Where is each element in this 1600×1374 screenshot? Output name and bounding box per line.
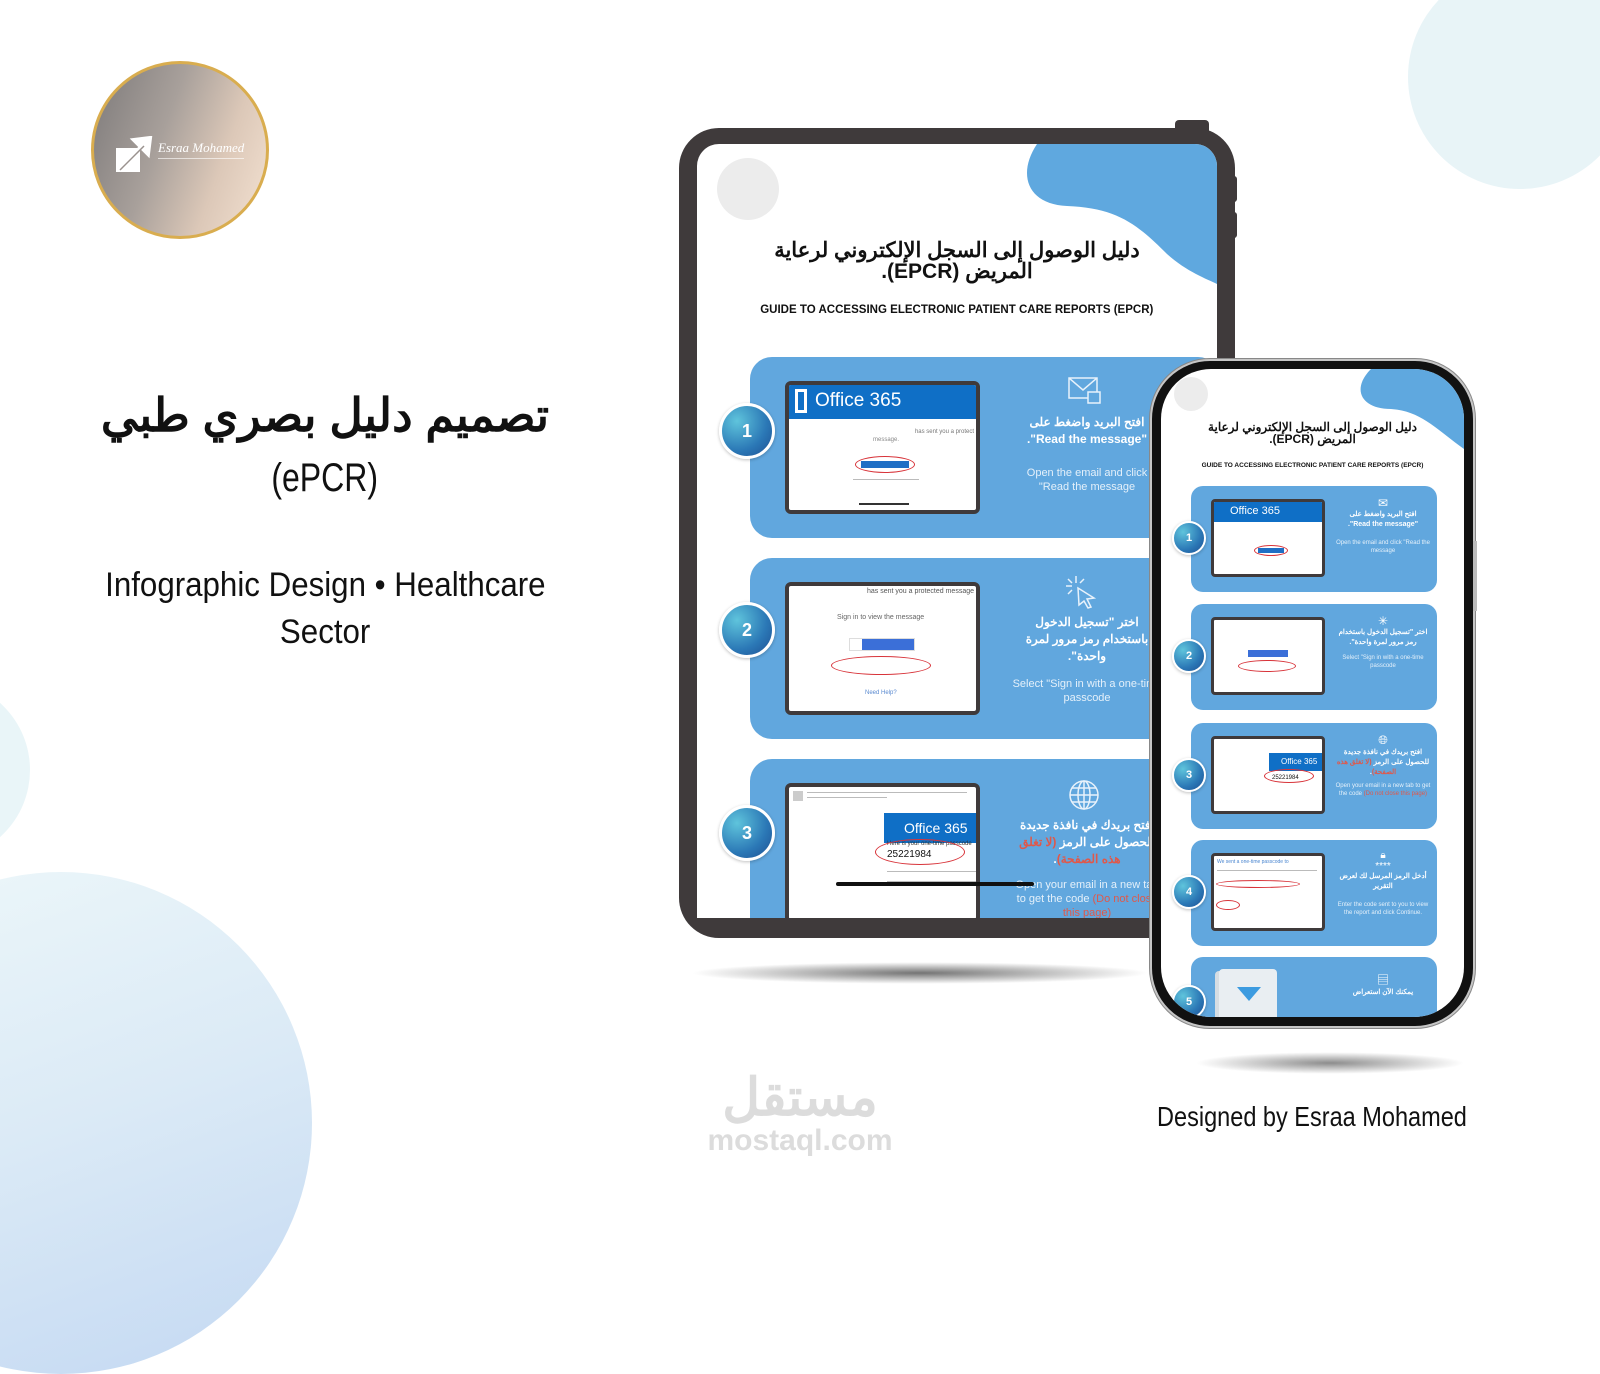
screenshot: sign in: has sent you a protected message	[867, 588, 974, 595]
step 1 text	[1027, 415, 1148, 493]
phone card 3: 25221984	[1272, 775, 1299, 781]
logo text: Esraa Mohamed	[158, 140, 244, 155]
phone card 1: ✉	[1378, 496, 1388, 510]
text block: category	[105, 566, 545, 651]
step 1 text: Open the email and click "Read the message	[1027, 467, 1147, 493]
phone card 2: Select "Sign in with a one-time passcode	[1342, 655, 1424, 669]
phone card 1: "Read the message".	[1348, 521, 1418, 528]
step number 2	[719, 602, 775, 658]
icon: mail lock	[1068, 377, 1101, 404]
phone card 4	[1191, 840, 1437, 946]
screenshot: sign in: Sign in to view the message	[837, 614, 924, 621]
subheading: ePCR: (ePCR)	[272, 456, 378, 500]
step 1 text: "Read the message".	[1027, 432, 1147, 446]
home indicator	[836, 882, 1034, 886]
step number 3: 3	[742, 822, 752, 842]
phone card 4: أدخل الرمز المرسل لك لعرض التقرير	[1339, 873, 1427, 890]
grey circle	[717, 158, 779, 220]
screenshot: passcode email: 25221984	[887, 849, 932, 860]
phone number 3: 3	[1186, 769, 1192, 781]
phone number 1	[1172, 521, 1206, 555]
step 2 text: Select "Sign in with a one-time passcode	[1013, 678, 1161, 704]
phone number 2: 2	[1186, 650, 1192, 662]
icon: globe	[1069, 780, 1099, 810]
phone card 4: Enter the code sent to you to view the report and click Continue.	[1338, 902, 1428, 916]
phone card 1: Open the email and click "Read the message	[1336, 540, 1430, 554]
step 1 text: افتح البريد واضغط على	[1030, 415, 1144, 429]
phone card 3: 🌐︎	[1378, 733, 1388, 747]
screenshot: office 365	[785, 381, 980, 514]
phone card 3: Office 365	[1281, 757, 1317, 766]
step 3 text: افتح بريدك في نافذة جديدة للحصول على الرمز (لا تغلق هذه الصفحة).	[1019, 818, 1155, 866]
grey circle	[1174, 377, 1208, 411]
card 3	[750, 759, 1220, 959]
top button	[1175, 120, 1209, 132]
tablet subtitle: GUIDE TO ACCESSING ELECTRONIC PATIENT CARE REPORTS (EPCR)	[760, 302, 1154, 316]
phone number 3	[1172, 758, 1206, 792]
phone card 5	[1191, 957, 1437, 1063]
screenshot: office 365: Office 365	[815, 390, 901, 411]
phone card 1: Office 365	[1230, 505, 1280, 517]
phone card 3: افتح بريدك في نافذة جديدة للحصول على الرمز (لا تغلق هذه الصفحة).	[1337, 749, 1429, 776]
screenshot: sign in	[785, 582, 980, 715]
phone number 5: 5	[1186, 996, 1192, 1008]
heading: arabic title: تصميم دليل بصري طبي	[101, 389, 549, 441]
phone card 3: Open your email in a new tab to get the code (Do not close this page)	[1336, 783, 1430, 797]
step 3 text	[1015, 818, 1159, 918]
tablet screen	[697, 144, 1217, 918]
phone number 1: 1	[1186, 532, 1192, 544]
tablet device	[679, 120, 1237, 938]
phone screen	[1161, 369, 1464, 1017]
watermark: mostaql: mostaql.com	[707, 1124, 893, 1157]
screenshot: passcode email: Here is your one-time passcode	[887, 841, 972, 847]
step number 2: 2	[742, 620, 752, 640]
phone card 4: We sent a one-time passcode to	[1217, 859, 1289, 865]
phone number 4	[1172, 875, 1206, 909]
phone card 5: يمكنك الآن استعراض	[1353, 989, 1413, 996]
phone card 4: 🔒︎	[1380, 850, 1386, 861]
phone card 2: اختر "تسجيل الدخول باستخدام رمز مرور لمرة واحدة".	[1339, 629, 1427, 646]
phone card 2	[1191, 604, 1437, 710]
phone number 5	[1172, 985, 1206, 1019]
side buttons	[1229, 176, 1237, 202]
watermark: mostaql	[707, 1069, 893, 1157]
decorative circle left middle	[0, 680, 30, 860]
tablet shadow	[690, 962, 1150, 984]
screenshot: passcode email: Office 365	[904, 820, 968, 836]
tablet title arabic: دليل الوصول إلى السجل الإلكتروني لرعاية المريض (EPCR).	[774, 239, 1140, 283]
phone title: دليل الوصول إلى السجل الإلكتروني لرعاية المريض (EPCR).	[1208, 420, 1417, 446]
step 3 text: Open your email in a new tab to get the code (Do not close this page)	[1015, 879, 1159, 918]
phone card 1: افتح البريد واضغط على	[1349, 511, 1417, 518]
blob	[1360, 369, 1464, 449]
logo	[91, 61, 269, 239]
screenshot: sign in: Need Help?	[865, 690, 897, 696]
icon: arrow logo mark	[116, 136, 152, 172]
decorative circle top right	[1408, 0, 1600, 189]
tablet body	[679, 128, 1235, 938]
card 1	[750, 357, 1220, 538]
text block: category: Infographic Design • Healthcare	[105, 566, 545, 604]
phone card 5: ▤	[1377, 973, 1389, 987]
screenshot: office 365: has sent you a protect	[915, 429, 974, 435]
screenshot: passcode email	[785, 783, 980, 923]
step 2 text: اختر "تسجيل الدخول باستخدام رمز مرور لمرة واحدة".	[1026, 615, 1148, 663]
phone number 2	[1172, 639, 1206, 673]
phone side button	[1473, 541, 1477, 611]
phone card 4: ****	[1375, 861, 1391, 872]
phone subtitle: GUIDE TO ACCESSING ELECTRONIC PATIENT CARE REPORTS (EPCR)	[1202, 462, 1423, 469]
step number 3	[719, 805, 775, 861]
watermark: mostaql: مستقل	[722, 1069, 878, 1127]
text block: category: Sector	[280, 613, 370, 651]
card 2	[750, 558, 1220, 739]
icon: cursor click	[1066, 576, 1096, 609]
phone device	[1150, 359, 1475, 1028]
step 2 text	[1013, 615, 1161, 704]
phone card 3	[1191, 723, 1437, 829]
blob top right	[1027, 144, 1217, 284]
decorative circle bottom left	[0, 872, 312, 1374]
phone number 4: 4	[1186, 886, 1192, 898]
icon: document download	[1219, 969, 1277, 1029]
step number 1	[719, 403, 775, 459]
phone card 1	[1191, 486, 1437, 592]
credit text: Designed by Esraa Mohamed	[1157, 1101, 1467, 1132]
phone shadow	[1195, 1052, 1465, 1074]
step number 1: 1	[742, 420, 752, 440]
screenshot: office 365: message.	[873, 437, 899, 443]
phone card 2: ✳	[1378, 614, 1388, 628]
